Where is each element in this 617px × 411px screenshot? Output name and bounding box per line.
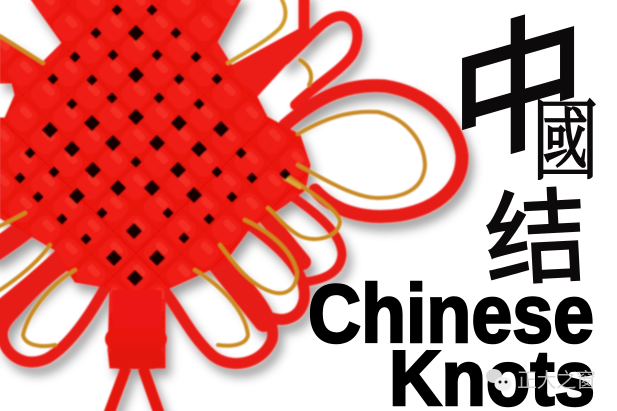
bottom right loop (162, 255, 273, 363)
upper right small loop (285, 16, 357, 105)
top right strand (298, 0, 310, 30)
far left strand (0, 250, 70, 315)
knot body (0, 0, 310, 368)
character: 國: 國 (532, 71, 599, 198)
lower right loop 2 (250, 225, 304, 319)
red knot (0, 0, 462, 411)
lower right loop 1 (290, 195, 342, 282)
watermark icon: chat bubbles (486, 369, 512, 391)
large right loop (285, 86, 462, 216)
knot holes (16, 6, 290, 285)
gold cords (0, 0, 425, 346)
calligraphy title: 中國结 (451, 0, 599, 307)
bottom left loop (2, 262, 105, 362)
neck knots (105, 290, 167, 369)
tassel cords (108, 368, 160, 411)
lower right fat band (262, 212, 303, 262)
bottom right fat band (208, 252, 264, 322)
watermark text: 正大之窗 (517, 364, 596, 393)
top right red band (230, 28, 312, 97)
knot loops with shadow (0, 0, 462, 411)
character: 结: 结 (481, 155, 590, 307)
